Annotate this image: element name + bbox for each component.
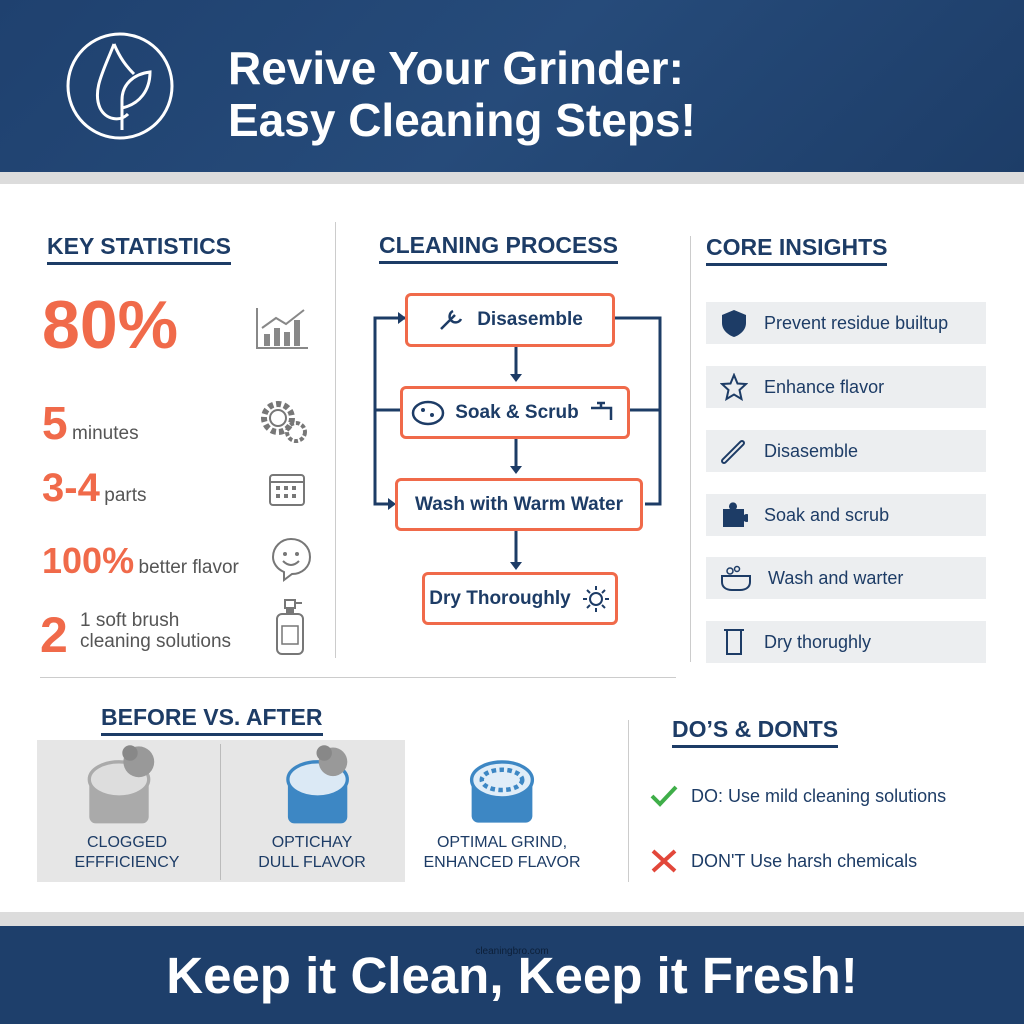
step: disasemble bbox=[405, 293, 615, 347]
step: disasemble: Disasemble bbox=[477, 309, 583, 330]
heading: key statistics: KEY STATISTICS bbox=[47, 233, 231, 259]
panel: before vs after bbox=[37, 704, 581, 882]
panel: key statistics: cleaning solutions bbox=[80, 631, 231, 652]
caption: clogged bbox=[75, 834, 179, 871]
panel: key statistics: 1 soft brush bbox=[80, 610, 179, 631]
step: wash with warm water: Wash with Warm Water bbox=[415, 494, 623, 514]
do item: DO: Use mild cleaning solutions bbox=[691, 786, 946, 806]
insight: soak and scrub bbox=[706, 494, 986, 536]
panel: key statistics bbox=[40, 233, 311, 663]
heading: core insights: CORE INSIGHTS bbox=[706, 234, 887, 260]
icon: clogged grinder bbox=[88, 745, 154, 824]
stat 100% better flavor: 100% better flavor bbox=[42, 540, 239, 581]
caption: clogged: EFFFICIENCY bbox=[75, 854, 179, 871]
footer slogan: Keep it Clean, Keep it Fresh! bbox=[166, 947, 858, 1004]
caption: optimal bbox=[423, 834, 581, 871]
caption: optimal: OPTIMAL GRIND, bbox=[437, 834, 567, 851]
stat 5 minutes: 5 minutes bbox=[42, 397, 139, 449]
heading: cleaning process: CLEANING PROCESS bbox=[379, 232, 618, 258]
title: Easy Cleaning Steps! bbox=[228, 94, 696, 146]
insight: enhance flavor: Enhance flavor bbox=[764, 376, 884, 396]
stat 3-4 parts: 3-4 parts bbox=[42, 466, 147, 510]
insight: soak and scrub: Soak and scrub bbox=[764, 504, 889, 524]
insight: dry: Dry thorughly bbox=[764, 632, 871, 652]
icon: smiley bbox=[272, 538, 311, 582]
icon: clean grinder bbox=[470, 760, 534, 823]
insight: dry bbox=[706, 621, 986, 663]
caption: optichay bbox=[258, 834, 366, 871]
step: dry thoroughly bbox=[422, 572, 618, 625]
caption: optimal: ENHANCED FLAVOR bbox=[423, 854, 581, 871]
flow connectors bbox=[374, 312, 662, 570]
step: wash with warm water bbox=[395, 478, 643, 531]
caption: optichay: OPTICHAY bbox=[272, 834, 352, 851]
insight: prevent residue: Prevent residue builtup bbox=[764, 312, 948, 332]
icon: dull grinder bbox=[286, 745, 349, 824]
panel: cleaning process bbox=[374, 232, 662, 570]
title bbox=[228, 42, 696, 146]
insight: wash bbox=[706, 557, 986, 599]
panel: dos and donts bbox=[650, 716, 946, 872]
icon: gear clock bbox=[261, 401, 307, 443]
heading: dos and donts: DO’S & DONTS bbox=[672, 716, 838, 742]
footer banner bbox=[0, 926, 1024, 1024]
insight: enhance flavor bbox=[706, 366, 986, 408]
stat 80%: 80% bbox=[42, 287, 178, 363]
stat 2 brush: 2 bbox=[40, 607, 68, 663]
icon: spray bottle bbox=[276, 599, 304, 655]
insight: disasemble bbox=[706, 430, 986, 472]
dont item: DON'T Use harsh chemicals bbox=[691, 850, 917, 870]
insight: disasemble: Disasemble bbox=[764, 440, 858, 460]
icon: growth chart bbox=[256, 308, 308, 349]
caption: clogged: CLOGGED bbox=[87, 834, 167, 851]
insight: prevent residue bbox=[706, 302, 986, 344]
step: soak and scrub bbox=[400, 386, 630, 439]
icon: drop and leaf bbox=[66, 32, 174, 140]
caption: optichay: DULL FLAVOR bbox=[258, 854, 366, 871]
step: soak and scrub: Soak & Scrub bbox=[455, 402, 579, 422]
header banner bbox=[0, 0, 1024, 172]
icon: calendar bbox=[269, 474, 305, 506]
heading: before vs after: BEFORE VS. AFTER bbox=[101, 704, 322, 730]
step: dry thoroughly: Dry Thoroughly bbox=[429, 588, 571, 608]
before panels background bbox=[37, 740, 405, 882]
insight: wash: Wash and warter bbox=[768, 568, 903, 588]
watermark: cleaningbro.com bbox=[475, 946, 549, 957]
title: Revive Your Grinder: bbox=[228, 42, 684, 94]
